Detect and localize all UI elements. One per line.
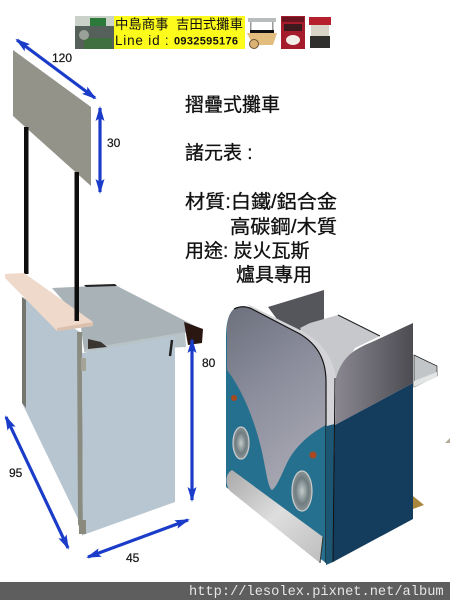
door latch [170,340,172,356]
arrow: width 120 [17,40,95,98]
stall rear corner [184,322,203,345]
spec heading: 諸元表 : [185,142,253,164]
material line 2: 高碳鋼/木質 [230,216,337,238]
arrow: depth 95: 95 [9,466,23,480]
footer bar [0,582,450,600]
van front upper grey mask [227,307,326,490]
banner photo [75,16,114,49]
stall side panel [22,297,80,523]
van side panel lower blue [333,383,413,562]
sign panel [13,50,91,186]
material line 1: 材質:白鐵/鋁合金 [185,191,337,213]
wooden counter plank [5,273,93,331]
banner yellow label: 0932595176 [174,36,238,48]
arrow: width 45: 45 [126,551,140,565]
van rear wing [268,290,324,330]
van bumper [226,470,323,563]
van headlight right [292,471,312,511]
banner yellow label [114,16,245,49]
door hinge [81,358,86,371]
van headlight left [233,427,249,459]
stall shelf edge [84,332,186,352]
van front face [226,307,326,563]
arrow: height 30 [100,108,121,192]
arrow: width 120: 120 [52,51,72,65]
product title: 摺疊式攤車 [185,94,280,116]
arrow: height 80: 80 [202,356,216,370]
van chrome trim [247,304,336,425]
stall front post [77,332,83,536]
sign pole right [74,172,79,321]
folding stall body [5,172,203,536]
arrow: depth 95 [6,417,68,548]
van top surface [300,315,380,378]
banner yellow label: Line id : [115,33,169,48]
footer bar: http://lesolex.pixnet.net/album [189,585,444,600]
cropped tan corner [445,438,450,443]
van corner column [326,424,335,565]
stall front door [82,336,175,535]
icon: striped popcorn cart [309,17,331,48]
van side panel upper [335,323,413,425]
banner: shop contact strip [75,16,331,49]
van shelf at back [414,355,437,387]
spec list [185,191,337,286]
use line 2: 爐具專用 [236,264,312,286]
arrow: height 30: 30 [107,136,121,150]
icon: wooden cart [247,18,277,48]
icon: red food cart [281,16,305,49]
stall top surface [52,285,203,350]
signboard [13,50,91,274]
retro van themed stall [226,290,437,565]
van indicator lights [231,395,237,401]
sign pole left [24,127,28,274]
use line 1: 用途: 炭火瓦斯 [185,240,310,262]
brown foot [413,496,424,509]
banner yellow label: 中島商事 吉田式攤車 [115,17,243,32]
arrow: width 45 [88,520,188,565]
